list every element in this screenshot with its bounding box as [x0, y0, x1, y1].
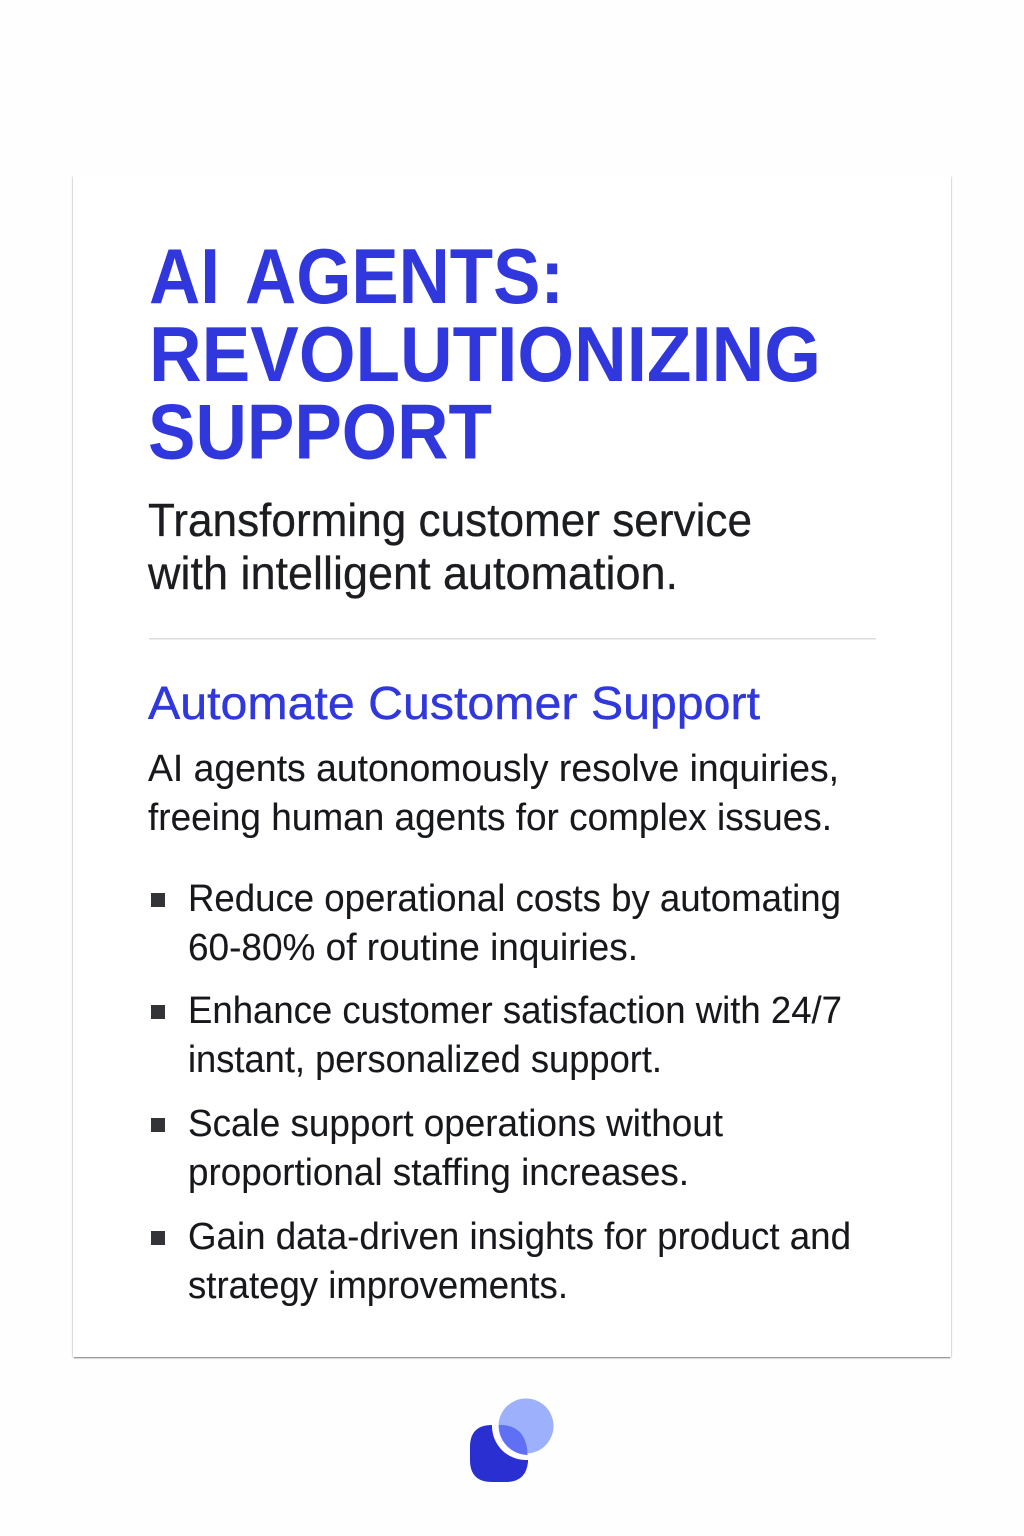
- bullet 2: instant, personalized support.: [188, 1039, 662, 1081]
- section description: freeing human agents for complex issues.: [148, 797, 832, 839]
- bullet 3: Scale support operations without: [188, 1103, 723, 1145]
- title: AI: [149, 232, 220, 320]
- subtitle: with intelligent automation.: [147, 547, 678, 599]
- page background: [72, 176, 952, 1482]
- title: AGENTS:: [245, 232, 564, 320]
- bullet 2: [151, 990, 842, 1081]
- title: REVOLUTIONIZING: [149, 310, 821, 398]
- subtitle: [147, 494, 752, 599]
- bullet 2: Enhance customer satisfaction with 24/7: [188, 990, 842, 1032]
- icon: logo: [470, 1398, 554, 1482]
- bullet 3: [151, 1103, 723, 1194]
- section heading: Automate Customer Support: [148, 677, 760, 729]
- section description: AI agents autonomously resolve inquiries,: [148, 748, 839, 790]
- panel: main card: [73, 176, 951, 1357]
- bullet 4: strategy improvements.: [188, 1265, 568, 1307]
- title: [148, 232, 821, 476]
- bullet 1: 60-80% of routine inquiries.: [188, 927, 638, 969]
- subtitle: Transforming customer service: [148, 494, 752, 546]
- bullet 1: Reduce operational costs by automating: [188, 878, 841, 920]
- title: SUPPORT: [148, 388, 492, 476]
- section description: [148, 748, 839, 839]
- bullet 4: [151, 1216, 851, 1307]
- bullet 3: proportional staffing increases.: [188, 1152, 689, 1194]
- bullet list: [151, 878, 851, 1307]
- bullet 4: Gain data-driven insights for product and: [188, 1216, 851, 1258]
- bullet 1: [151, 878, 841, 969]
